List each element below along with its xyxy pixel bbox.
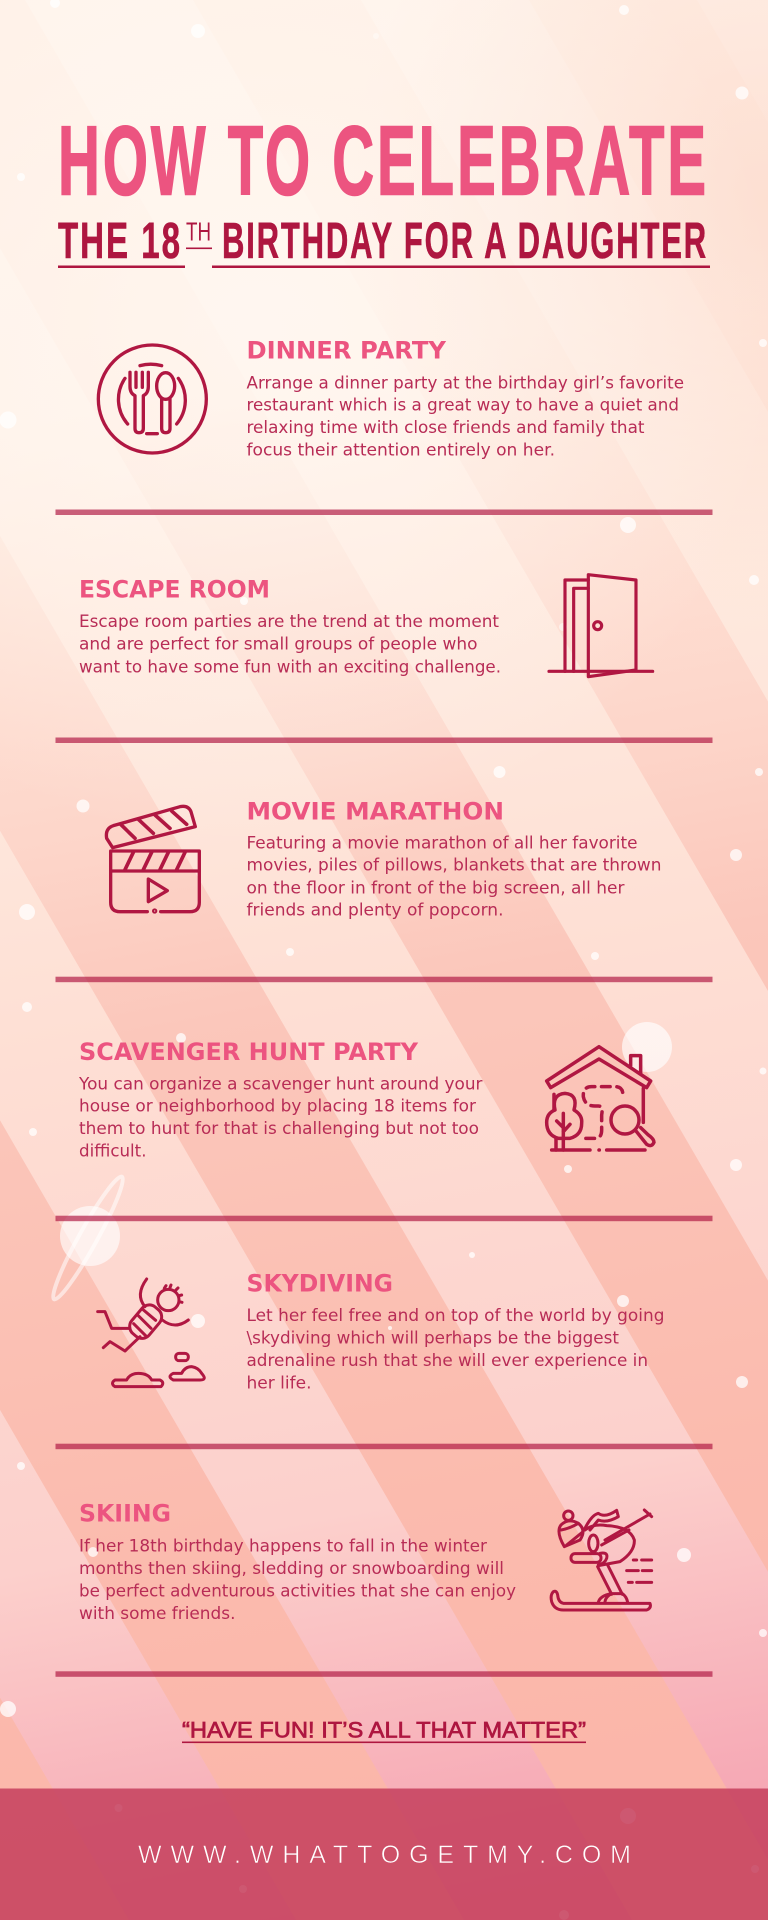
icon: house with treasure path — [547, 1047, 654, 1150]
icon: skydiver and clouds — [98, 1279, 204, 1387]
text: skiing description: with some friends. — [79, 1604, 236, 1623]
dividers — [56, 510, 712, 1677]
text: movie marathon description: on the floor in front of the big screen, all her — [246, 878, 625, 897]
text: movie marathon description — [246, 833, 662, 920]
heading: escape room: ESCAPE ROOM — [79, 576, 270, 604]
panel: skydiving — [98, 1270, 664, 1392]
text: skydiving description: Let her feel free and on top of the world by going — [246, 1306, 664, 1325]
text: skiing description: be perfect adventurous activities that she can enjoy — [79, 1582, 516, 1601]
panel: movie marathon — [106, 797, 661, 920]
text: dinner party description: relaxing time with close friends and family that — [246, 418, 645, 437]
icon: skier — [551, 1510, 652, 1610]
text: dinner party description — [246, 373, 684, 460]
text: scavenger hunt description — [78, 1074, 483, 1161]
closing quote: “HAVE FUN! IT’S ALL THAT MATTER” — [182, 1718, 586, 1743]
heading: scavenger hunt party: SCAVENGER HUNT PARTY — [79, 1038, 419, 1066]
heading: skydiving: SKYDIVING — [246, 1270, 393, 1298]
subtitle: TH — [186, 216, 211, 246]
text: skiing description: If her 18th birthday happens to fall in the winter — [79, 1537, 487, 1556]
panel: escape room — [79, 575, 653, 677]
text: skiing description: months then skiing, sledding or snowboarding will — [79, 1559, 504, 1578]
planet decoration — [46, 1172, 130, 1304]
text: escape room description — [79, 612, 501, 676]
text: escape room description: want to have some fun with an exciting challenge. — [79, 657, 501, 676]
text: dinner party description: restaurant which is a great way to have a quiet and — [246, 396, 679, 414]
footer website: WWW.WHATTOGETMY.COM — [138, 1841, 631, 1869]
text: skiing description — [79, 1537, 516, 1623]
text: scavenger hunt description: house or neighborhood by placing 18 items for — [79, 1096, 476, 1116]
text: skydiving description: \skydiving which will perhaps be the biggest — [246, 1328, 619, 1347]
heading: movie marathon: MOVIE MARATHON — [246, 797, 504, 825]
heading: dinner party: DINNER PARTY — [246, 337, 447, 365]
icon: plate and cutlery — [98, 345, 206, 453]
text: dinner party description: Arrange a dinner party at the birthday girl’s favorite — [246, 373, 684, 392]
text: movie marathon description: Featuring a movie marathon of all her favorite — [246, 833, 638, 852]
text: scavenger hunt description: You can organize a scavenger hunt around your — [78, 1074, 483, 1093]
text: scavenger hunt description: them to hunt for that is challenging but not too — [79, 1119, 479, 1138]
text: escape room description: and are perfect for small groups of people who — [79, 634, 478, 654]
panel: scavenger hunt party — [78, 1038, 654, 1161]
panel: skiing — [79, 1500, 652, 1623]
text: skydiving description: adrenaline rush that she will ever experience in — [246, 1351, 648, 1370]
panel: dinner party — [98, 337, 684, 460]
heading: skiing: SKIING — [79, 1500, 171, 1528]
text: escape room description: Escape room parties are the trend at the moment — [79, 612, 499, 631]
text: skydiving description: her life. — [246, 1373, 312, 1392]
text: scavenger hunt description: difficult. — [79, 1142, 146, 1161]
footer band — [0, 1788, 768, 1920]
icon: open door — [549, 575, 653, 677]
subtitle: THE 18 — [58, 212, 182, 269]
icon: clapperboard — [106, 806, 199, 912]
text: skydiving description — [246, 1306, 664, 1392]
text: dinner party description: focus their attention entirely on her. — [246, 441, 555, 460]
text: movie marathon description: friends and plenty of popcorn. — [246, 901, 504, 920]
text: movie marathon description: movies, piles of pillows, blankets that are thrown — [246, 856, 662, 875]
subtitle — [58, 212, 710, 269]
